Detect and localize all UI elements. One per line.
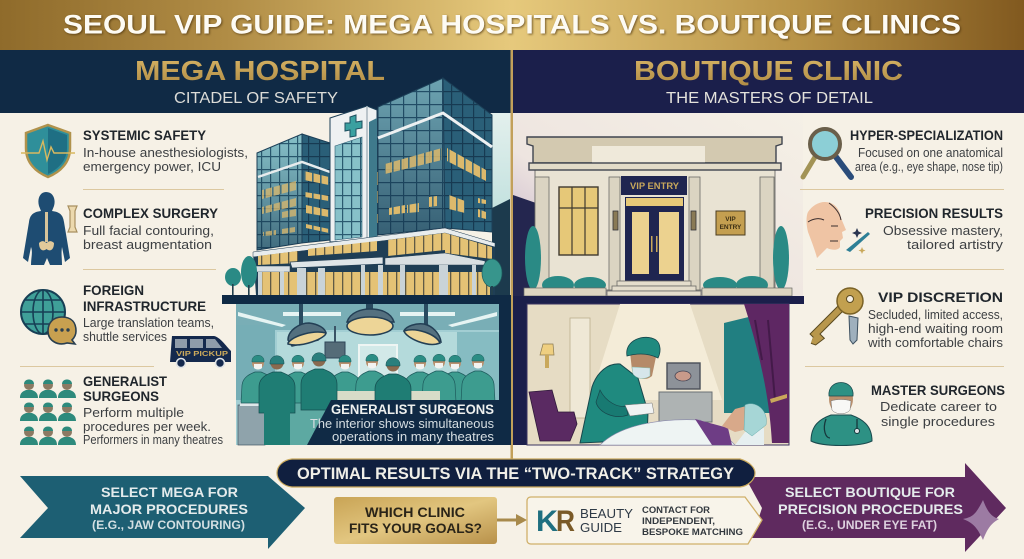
icon: keys — [812, 288, 863, 344]
feature: foreign infrastructure — [21, 282, 231, 368]
caption: generalist surgeons: operations in many theatres — [332, 430, 494, 444]
icon: trees beside hospital — [225, 256, 502, 295]
illustration: private treatment room — [527, 304, 789, 445]
facade — [535, 170, 775, 290]
panel: mega hospital header: MEGA HOSPITAL — [135, 55, 385, 86]
cornice — [527, 137, 782, 170]
callout: which clinic fits your goals — [334, 497, 497, 544]
feature: complex surgery: breast augmentation — [83, 237, 212, 252]
arrow: select mega — [20, 476, 305, 549]
monitor and cabinet — [659, 363, 712, 422]
steps — [607, 281, 701, 296]
arrow: select boutique: SELECT BOUTIQUE FOR — [785, 484, 955, 500]
icon: face profile with scalpel — [806, 202, 870, 258]
feature: VIP discretion: high-end waiting room — [868, 321, 1003, 336]
callout: KR beauty guide contact: BEAUTY — [580, 506, 633, 521]
feature: generalist surgeons: Perform multiple — [83, 405, 184, 420]
banner: two-track strategy — [277, 459, 755, 487]
purple armchair — [529, 390, 577, 441]
equipment and table — [238, 405, 265, 445]
arrow: select boutique: PRECISION PROCEDURES — [778, 501, 963, 517]
VIP entry plaque: VIP — [725, 216, 736, 223]
feature: master surgeons: Dedicate career to — [880, 399, 997, 414]
arrow: select boutique: (E.G., UNDER EYE FAT) — [802, 518, 937, 532]
illustration: boutique clinic exterior — [513, 113, 803, 296]
feature: VIP discretion: Secluded, limited access, — [868, 307, 1003, 322]
feature: precision results: tailored artistry — [907, 237, 1004, 252]
panel: boutique clinic header: BOUTIQUE CLINIC — [634, 55, 903, 86]
panel: mega hospital header: CITADEL OF SAFETY — [174, 90, 338, 107]
feature: complex surgery: Full facial contouring, — [83, 223, 214, 238]
feature: foreign infrastructure: shuttle services — [83, 329, 167, 344]
curtains — [724, 304, 789, 443]
feature: VIP discretion: with comfortable chairs — [867, 335, 1003, 350]
callout: KR beauty guide contact: INDEPENDENT, — [642, 516, 715, 526]
icon: globe with chat bubble — [21, 290, 76, 344]
floor bar under clinic — [513, 296, 804, 304]
feature: master surgeons — [811, 382, 1005, 446]
feature: generalist surgeons: Performers in many theatres — [83, 432, 223, 447]
right wing — [371, 78, 492, 235]
callout: KR beauty guide contact: CONTACT FOR — [642, 505, 711, 515]
centre divider — [510, 50, 513, 460]
podium — [253, 228, 495, 295]
feature: precision results: Obsessive mastery, — [883, 223, 1003, 238]
feature: hyper-specialization — [803, 127, 1003, 177]
arrow: connector to KR beauty guide — [497, 514, 527, 526]
feature: generalist surgeons: procedures per week. — [83, 419, 211, 434]
feature: complex surgery: COMPLEX SURGERY — [83, 205, 219, 221]
feature: systemic safety: emergency power, ICU — [83, 159, 221, 174]
feature: generalist surgeons: GENERALIST — [83, 373, 167, 389]
caption: generalist surgeons: The interior shows simultaneous — [310, 417, 494, 431]
VIP entry sign — [621, 176, 687, 195]
patient on bed — [600, 404, 766, 445]
arrow: select boutique — [745, 463, 1006, 552]
VIP entry sign: VIP ENTRY — [630, 181, 679, 191]
feature: hyper-specialization: HYPER-SPECIALIZATION — [850, 127, 1003, 143]
feature: master surgeons: MASTER SURGEONS — [871, 382, 1005, 398]
icon: magnifying glass — [803, 129, 851, 177]
central tower with cross — [330, 106, 377, 242]
surgical lamps — [288, 304, 441, 346]
caption: generalist surgeons: GENERALIST SURGEONS — [331, 402, 494, 417]
arrow: select mega: MAJOR PROCEDURES — [90, 501, 248, 517]
feature: precision results: PRECISION RESULTS — [865, 205, 1003, 221]
feature: systemic safety — [21, 125, 248, 177]
VIP entry plaque — [716, 211, 745, 235]
surgical team — [241, 353, 495, 445]
feature: precision results — [806, 202, 1004, 258]
feature: VIP discretion — [812, 288, 1003, 350]
logo: KR: R — [556, 505, 575, 538]
title banner: SEOUL VIP GUIDE: MEGA HOSPITALS VS. BOUTIQUE CLINICS — [63, 10, 961, 40]
logo: KR: K — [536, 505, 558, 538]
entrance door — [625, 197, 684, 290]
feature: foreign infrastructure: INFRASTRUCTURE — [83, 298, 206, 314]
floor bar under hospital — [222, 295, 511, 304]
feature: systemic safety: SYSTEMIC SAFETY — [83, 127, 207, 143]
caption: generalist surgeons — [307, 400, 499, 445]
icon: grid of surgeons — [20, 380, 76, 445]
icon: body with bone — [23, 192, 77, 265]
feature: VIP discretion: VIP DISCRETION — [878, 289, 1003, 305]
icon: VIP pickup van — [170, 336, 231, 368]
ceiling lights — [238, 312, 497, 327]
pilasters — [535, 177, 774, 290]
window — [559, 187, 598, 255]
illustration: operating theatre — [236, 304, 511, 445]
feature: systemic safety: In-house anesthesiologists, — [83, 145, 248, 160]
illustration: hospital building — [253, 78, 495, 295]
callout: which clinic fits your goals: WHICH CLINIC — [365, 504, 465, 520]
logo: KR — [536, 505, 575, 538]
feature: master surgeons: single procedures — [881, 414, 996, 429]
banner: two-track strategy: OPTIMAL RESULTS VIA THE “TWO-TRACK” STRATEGY — [297, 464, 735, 483]
panel: mega hospital side background — [492, 113, 510, 303]
wall sconce — [540, 344, 554, 368]
VIP entry plaque: ENTRY — [720, 224, 742, 231]
feature: hyper-specialization: Focused on one anatomical — [858, 145, 1003, 160]
feature: complex surgery — [23, 192, 219, 265]
icon: master surgeon — [811, 382, 872, 446]
left wing — [257, 134, 330, 250]
icon: shield with heartbeat — [21, 125, 75, 177]
callout: which clinic fits your goals: FITS YOUR GOALS? — [349, 520, 482, 536]
feature: generalist surgeons: SURGEONS — [83, 388, 159, 404]
panel: boutique clinic header — [513, 50, 1024, 113]
arrow: select mega: SELECT MEGA FOR — [101, 484, 238, 500]
panel: boutique clinic header: THE MASTERS OF DETAIL — [666, 90, 873, 107]
feature: foreign infrastructure: FOREIGN — [83, 282, 144, 298]
callout: KR beauty guide contact: GUIDE — [580, 520, 622, 535]
surgeon — [580, 337, 660, 443]
title banner — [0, 0, 1024, 50]
arrow: select mega: (E.G., JAW CONTOURING) — [92, 518, 245, 532]
trees and shrubs — [525, 226, 789, 294]
callout: KR beauty guide contact: BESPOKE MATCHING — [642, 527, 743, 537]
panel: mega hospital header — [0, 50, 511, 113]
feature: generalist surgeons — [20, 373, 223, 447]
door lamps — [613, 211, 696, 230]
feature: foreign infrastructure: Large translation teams, — [83, 315, 214, 330]
icon: VIP pickup van: VIP PICKUP — [176, 351, 228, 358]
callout: KR beauty guide contact — [527, 497, 762, 544]
